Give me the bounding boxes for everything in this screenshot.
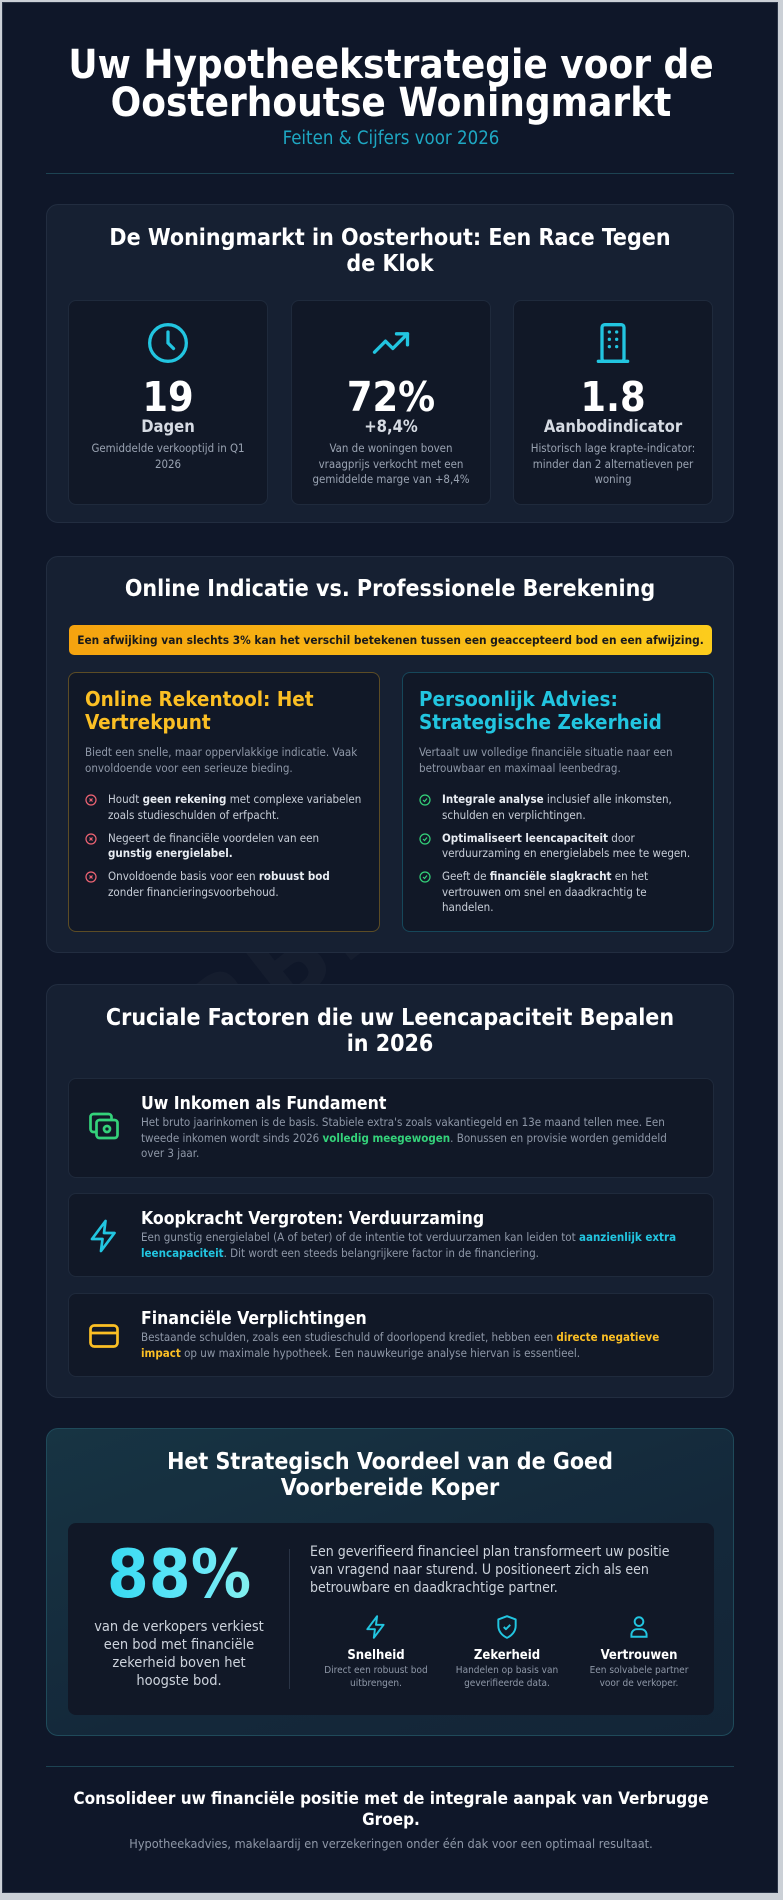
panel: cruciale factoren [46, 984, 734, 1398]
card: online rekentool: Houdt geen rekening met complexe variabelen zoals studieschulden of erfpacht. [108, 792, 361, 822]
benefit: vertrouwen: Vertrouwen [601, 1648, 677, 1663]
card: online rekentool: Online Rekentool: Het [85, 687, 314, 711]
heading: strategisch voordeel: Voorbereide Koper [281, 1474, 499, 1500]
card: persoonlijk advies: Optimaliseert leencapaciteit door verduurzaming en energielabels mee te wegen. [442, 830, 690, 860]
title: Oosterhoutse Woningmarkt [111, 80, 671, 126]
icon: trend [372, 332, 410, 354]
callout banner [69, 625, 712, 655]
heading: cruciale factoren: in 2026 [347, 1030, 433, 1056]
factor: verplichtingen: Financiële Verplichtingen [141, 1309, 367, 1329]
benefit: zekerheid: Handelen op basis van geverifieerde data. [456, 1665, 558, 1689]
heading: woningmarkt: de Klok [346, 250, 434, 276]
title: Uw Hypotheekstrategie voor de [68, 42, 714, 88]
factor: verduurzaming: Een gunstig energielabel (A of beter) of de intentie tot verduurzamen kan leiden tot aanzienlijk extra leencapaciteit. Dit wordt een steeds belangrijkere factor in de financiering. [141, 1230, 676, 1260]
icon: clock [148, 323, 188, 363]
big stat 88% [94, 1535, 264, 1689]
big stat 88%: 88% [107, 1535, 251, 1613]
stat card: 1.8 [513, 300, 713, 505]
text: verified plan: Een geverifieerd financieel plan transformeert uw positie van vragend naar sturend. U positioneert zich als een betrouwbare en daadkrachtige partner. [310, 1544, 670, 1596]
benefit: zekerheid: Zekerheid [474, 1648, 540, 1663]
watermark: VERBRUGGE [43, 644, 674, 1174]
stat card: 72% [291, 300, 491, 505]
inner box [68, 1523, 714, 1715]
card: persoonlijk advies: Strategische Zekerheid [419, 710, 662, 734]
icon: building [596, 323, 630, 363]
card: online rekentool: Negeert de financiële voordelen van een gunstig energielabel. [108, 830, 319, 860]
benefit: snelheid [324, 1615, 428, 1689]
stat card: 1.8: 1.8 [580, 373, 646, 421]
stat card: 72%: Van de woningen boven vraagprijs verkocht met een gemiddelde marge van +8,4% [313, 441, 469, 486]
benefit: vertrouwen [590, 1616, 688, 1689]
card: persoonlijk advies: Integrale analyse inclusief alle inkomsten, schulden en verplichtingen. [442, 792, 672, 822]
panel: strategisch voordeel [46, 1428, 734, 1736]
heading: woningmarkt: De Woningmarkt in Oosterhout: Een Race Tegen [109, 225, 671, 251]
stat card: 19 dagen: 19 [142, 373, 194, 421]
panel: online vs professioneel [46, 556, 734, 953]
icon: credit card [89, 1324, 119, 1348]
icon: lightning [90, 1220, 116, 1252]
benefit: snelheid: Direct een robuust bod uitbrengen. [324, 1665, 428, 1689]
card: persoonlijk advies: Persoonlijk Advies: [419, 687, 618, 711]
benefit: zekerheid [456, 1615, 558, 1689]
heading: cruciale factoren [106, 1005, 674, 1056]
card: persoonlijk advies [402, 672, 714, 932]
card: online rekentool [68, 672, 380, 932]
stat card: 72%: 72% [347, 373, 435, 421]
heading: woningmarkt [109, 225, 671, 276]
subtitle: Feiten & Cijfers voor 2026 [283, 128, 499, 149]
stat card: 19 dagen: Dagen [141, 417, 195, 436]
stat card: 1.8: Historisch lage krapte-indicator: minder dan 2 alternatieven per woning [531, 441, 695, 486]
heading: online vs professioneel: Online Indicatie vs. Professionele Berekening [125, 576, 655, 602]
factor: verplichtingen [68, 1293, 714, 1377]
stat card: 72%: +8,4% [364, 417, 418, 436]
factor: inkomen [68, 1078, 714, 1178]
heading: cruciale factoren: Cruciale Factoren die uw Leencapaciteit Bepalen [106, 1005, 674, 1031]
card: persoonlijk advies: Vertaalt uw volledige financiële situatie naar een betrouwbaar en maximaal leenbedrag. [419, 745, 673, 774]
card: online rekentool: Vertrekpunt [85, 710, 211, 734]
title [68, 42, 714, 126]
stat card: 19 dagen [68, 300, 268, 505]
card: online rekentool: Onvoldoende basis voor een robuust bod zonder financieringsvoorbehoud. [108, 869, 330, 898]
heading: strategisch voordeel: Het Strategisch Voordeel van de Goed [167, 1449, 613, 1475]
factor: inkomen: Het bruto jaarinkomen is de basis. Stabiele extra's zoals vakantiegeld en 13e maand tellen mee. Een tweede inkomen wordt sinds 2026 volledig meegewogen. Bonussen en provisie worden gemiddeld over 3 jaar. [141, 1115, 667, 1160]
factor: verduurzaming [68, 1193, 714, 1277]
benefit: snelheid: Snelheid [347, 1648, 405, 1663]
icon: money [89, 1112, 119, 1140]
factor: verduurzaming: Koopkracht Vergroten: Verduurzaming [141, 1209, 484, 1229]
stat card: 19 dagen: Gemiddelde verkooptijd in Q1 2026 [91, 441, 245, 470]
factor: inkomen: Uw Inkomen als Fundament [141, 1094, 386, 1114]
benefit: vertrouwen: Een solvabele partner voor de verkoper. [590, 1665, 688, 1689]
heading: strategisch voordeel [167, 1449, 613, 1500]
panel: woningmarkt [46, 204, 734, 523]
card: online rekentool: Biedt een snelle, maar oppervlakkige indicatie. Vaak onvoldoende voor een serieuze bieding. [85, 745, 357, 774]
footer heading: Consolideer uw financiële positie met de integrale aanpak van Verbrugge Groep. [73, 1789, 709, 1830]
card: persoonlijk advies: Geeft de financiële slagkracht en het vertrouwen om snel en daadkrachtig te handelen. [442, 869, 648, 914]
big stat 88%: van de verkopers verkiest een bod met financiële zekerheid boven het hoogste bod. [94, 1619, 264, 1689]
factor: verplichtingen: Bestaande schulden, zoals een studieschuld of doorlopend krediet, hebben een directe negatieve impact op uw maximale hypotheek. Een nauwkeurige analyse hiervan is essentieel. [141, 1330, 659, 1360]
callout banner: Een afwijking van slechts 3% kan het verschil betekenen tussen een geaccepteerd bod en een afwijzing. [77, 633, 704, 647]
stat card: 1.8: Aanbodindicator [544, 417, 682, 436]
footer subtext: Hypotheekadvies, makelaardij en verzekeringen onder één dak voor een optimaal resultaat. [129, 1836, 653, 1851]
